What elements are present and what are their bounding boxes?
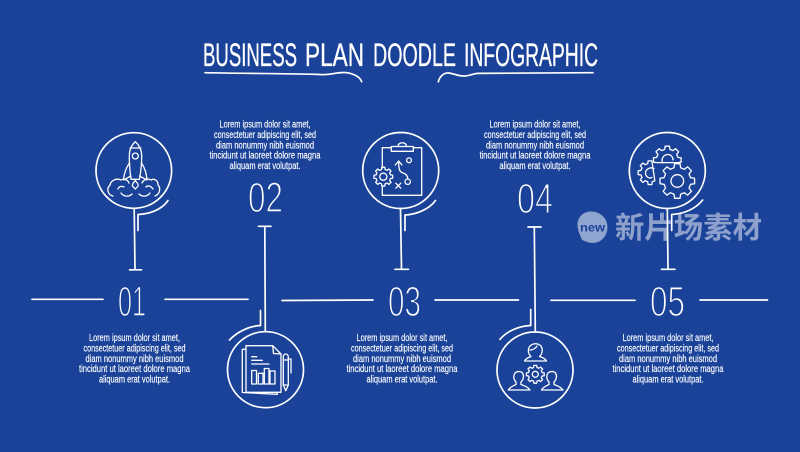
text block 1: consectetuer adipiscing elit, sed — [84, 344, 186, 354]
number 04: 04 — [517, 175, 553, 223]
text block 1: aliquam erat volutpat. — [99, 374, 170, 386]
text block 5: consectetuer adipiscing elit, sed — [617, 344, 719, 354]
watermark: 新片场素材 — [615, 212, 762, 245]
text block 4: Lorem ipsum dolor sit amet, — [490, 120, 580, 130]
text block 5 — [612, 333, 724, 386]
text block 4: tincidunt ut laoreet dolore magna — [480, 150, 591, 162]
text block 4: consectetuer adipiscing elit, sed — [484, 130, 586, 141]
text block 3: Lorem ipsum dolor sit amet, — [356, 333, 448, 344]
number 02: 02 — [248, 174, 283, 222]
text block 3 — [346, 333, 458, 386]
connector — [130, 200, 168, 270]
panel: step 4 — [480, 120, 591, 408]
number 01: 01 — [118, 278, 146, 326]
connector — [230, 226, 271, 340]
connector — [662, 200, 703, 269]
watermark: new — [580, 220, 606, 234]
connector — [395, 200, 436, 269]
title: BUSINESS — [203, 37, 297, 73]
icon: document report in circle — [228, 332, 304, 408]
text block 1 — [79, 333, 190, 386]
panel: step 3 — [346, 132, 458, 386]
panel: step 5 — [612, 132, 724, 386]
title — [203, 37, 598, 73]
text block 5: diam nonummy nibh euismod — [619, 354, 717, 365]
text block 1: diam nonummy nibh euismod — [86, 354, 184, 365]
panel: step 2 — [210, 120, 321, 408]
text block 3: consectetuer adipiscing elit, sed — [351, 344, 453, 354]
title: PLAN — [305, 37, 364, 73]
icon: clipboard strategy in circle — [363, 132, 439, 208]
title: DOODLE — [373, 37, 456, 73]
text block 4 — [480, 120, 591, 172]
text block 3: diam nonummy nibh euismod — [353, 354, 451, 365]
title: INFOGRAPHIC — [464, 37, 598, 73]
text block 1: tincidunt ut laoreet dolore magna — [79, 364, 190, 375]
number 03: 03 — [388, 278, 421, 326]
panel: step 1 — [79, 133, 190, 386]
connector — [500, 227, 541, 339]
text block 5: Lorem ipsum dolor sit amet, — [622, 333, 714, 344]
text block 1: Lorem ipsum dolor sit amet, — [89, 333, 180, 344]
number 05: 05 — [650, 278, 685, 326]
text block 5: aliquam erat volutpat. — [632, 374, 704, 386]
text block 3: tincidunt ut laoreet dolore magna — [346, 364, 458, 375]
title underline — [205, 72, 593, 82]
text block 2: Lorem ipsum dolor sit amet, — [220, 120, 310, 130]
icon: gears in circle — [629, 132, 705, 208]
text block 2: consectetuer adipiscing elit, sed — [214, 130, 316, 141]
icon: rocket in circle — [96, 133, 172, 208]
icon: team with gear in circle — [497, 332, 573, 408]
text block 2: aliquam erat volutpat. — [230, 161, 300, 172]
text block 4: aliquam erat volutpat. — [500, 161, 570, 172]
horizontal timeline segments — [32, 299, 768, 300]
text block 2: tincidunt ut laoreet dolore magna — [210, 150, 321, 162]
text block 2: diam nonummy nibh euismod — [216, 140, 314, 152]
text block 4: diam nonummy nibh euismod — [486, 140, 584, 152]
text block 3: aliquam erat volutpat. — [366, 374, 438, 386]
text block 5: tincidunt ut laoreet dolore magna — [612, 364, 724, 375]
text block 2 — [210, 120, 321, 172]
